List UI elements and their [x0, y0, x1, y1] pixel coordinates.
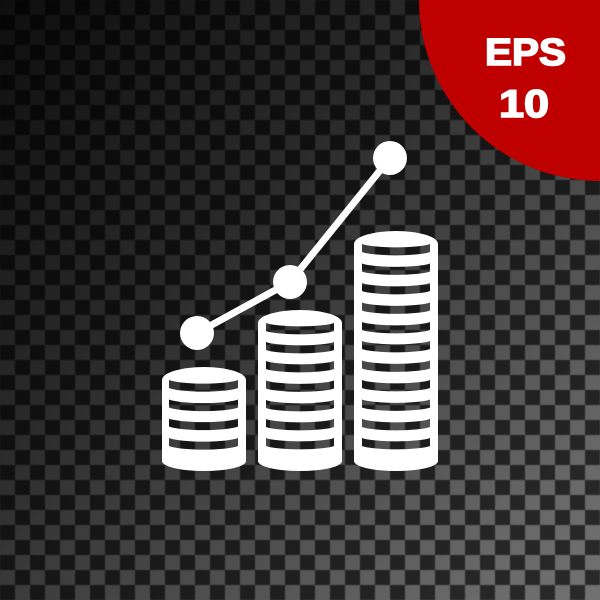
- badge: red corner: [419, 0, 600, 181]
- coin stack: tall: [354, 231, 438, 471]
- growth line with data points: [180, 141, 407, 350]
- coin stack: medium: [258, 310, 342, 471]
- badge text: 10: 10: [499, 83, 549, 126]
- badge text: EPS: EPS: [485, 32, 566, 74]
- icon: coin stacks with growth line: [162, 141, 438, 471]
- coin stack: short: [162, 367, 246, 471]
